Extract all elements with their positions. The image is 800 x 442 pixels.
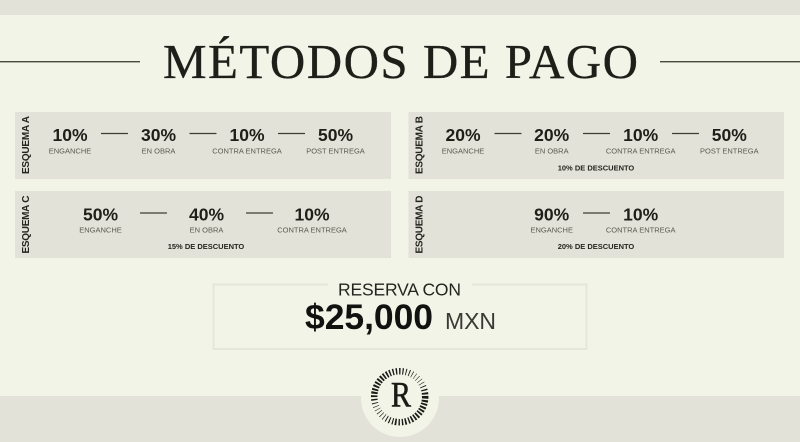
panel: esquema D	[408, 191, 784, 258]
step: 50% post entrega: POST ENTREGA	[700, 146, 759, 155]
step: 10% contra entrega: 10%	[229, 125, 265, 145]
reserve label: RESERVA CON	[338, 280, 461, 300]
step: 20% en obra: 20%	[534, 125, 570, 145]
label: esquema B: ESQUEMA B	[414, 116, 426, 174]
step: 10% contra entrega: 10%	[294, 204, 330, 224]
discount note: 15% DE DESCUENTO	[168, 242, 244, 251]
step: 50% enganche: ENGANCHE	[79, 225, 122, 234]
logo badge	[361, 359, 439, 437]
step: 50% post entrega: POST ENTREGA	[306, 146, 365, 155]
step: 40% en obra: 40%	[189, 204, 224, 224]
label: esquema A: ESQUEMA A	[21, 116, 32, 174]
callout: reservation deposit	[214, 280, 586, 349]
currency: MXN	[445, 308, 496, 334]
title rule: left	[0, 61, 140, 62]
step: 50% post entrega: 50%	[318, 125, 353, 145]
step: 90% enganche: 90%	[534, 204, 570, 224]
step: 50% enganche: 50%	[83, 204, 118, 224]
step: 10% contra entrega: CONTRA ENTREGA	[277, 225, 347, 234]
step: 20% enganche: ENGANCHE	[442, 146, 484, 155]
step: 20% en obra	[534, 125, 570, 155]
step: 10% contra entrega	[606, 204, 675, 234]
amount: $25,000	[305, 297, 433, 337]
arrow	[584, 132, 610, 134]
step: 40% en obra	[189, 204, 224, 234]
logo letter R: R	[391, 374, 411, 414]
step: 20% enganche	[442, 125, 484, 155]
bottom band	[0, 396, 800, 442]
step: 90% enganche: ENGANCHE	[530, 225, 573, 234]
label: esquema D: ESQUEMA D	[414, 196, 426, 254]
arrow	[495, 132, 521, 134]
arrow	[140, 212, 166, 214]
step: 10% contra entrega: 10%	[623, 204, 659, 224]
arrow	[278, 132, 304, 134]
step: 50% enganche	[79, 204, 122, 234]
step: 10% contra entrega: CONTRA ENTREGA	[606, 146, 675, 155]
title: MÉTODOS DE PAGO	[163, 34, 638, 89]
step: 10% contra entrega: CONTRA ENTREGA	[212, 146, 282, 155]
step: 10% enganche: 10%	[52, 125, 88, 145]
step: 20% en obra: EN OBRA	[535, 146, 569, 155]
step: 50% post entrega	[306, 125, 365, 155]
panel: esquema B	[408, 112, 784, 179]
logo sunburst	[374, 371, 425, 422]
step: 50% post entrega: 50%	[712, 125, 747, 145]
step: 10% contra entrega	[212, 125, 282, 155]
step: 40% en obra: EN OBRA	[190, 225, 223, 234]
arrow	[584, 212, 610, 214]
step: 10% enganche: ENGANCHE	[49, 146, 91, 155]
step: 10% enganche	[49, 125, 91, 155]
discount note: 10% DE DESCUENTO	[558, 163, 634, 172]
step: 50% post entrega	[700, 125, 759, 155]
step: 10% contra entrega	[277, 204, 347, 234]
arrow	[246, 212, 272, 214]
panel: esquema C	[15, 191, 391, 258]
arrow	[102, 132, 128, 134]
label: esquema C: ESQUEMA C	[21, 196, 32, 254]
step: 10% contra entrega	[606, 125, 675, 155]
panel: esquema A	[15, 112, 391, 179]
arrow	[672, 132, 698, 134]
step: 10% contra entrega: 10%	[623, 125, 659, 145]
step: 30% en obra	[141, 125, 176, 155]
title rule: right	[660, 61, 800, 62]
step: 30% en obra: 30%	[141, 125, 176, 145]
step: 20% enganche: 20%	[445, 125, 481, 145]
step: 30% en obra: EN OBRA	[142, 146, 175, 155]
top band	[0, 0, 800, 15]
step: 90% enganche	[530, 204, 573, 234]
arrow	[190, 132, 216, 134]
discount note: 20% DE DESCUENTO	[558, 242, 634, 251]
step: 10% contra entrega: CONTRA ENTREGA	[606, 225, 675, 234]
